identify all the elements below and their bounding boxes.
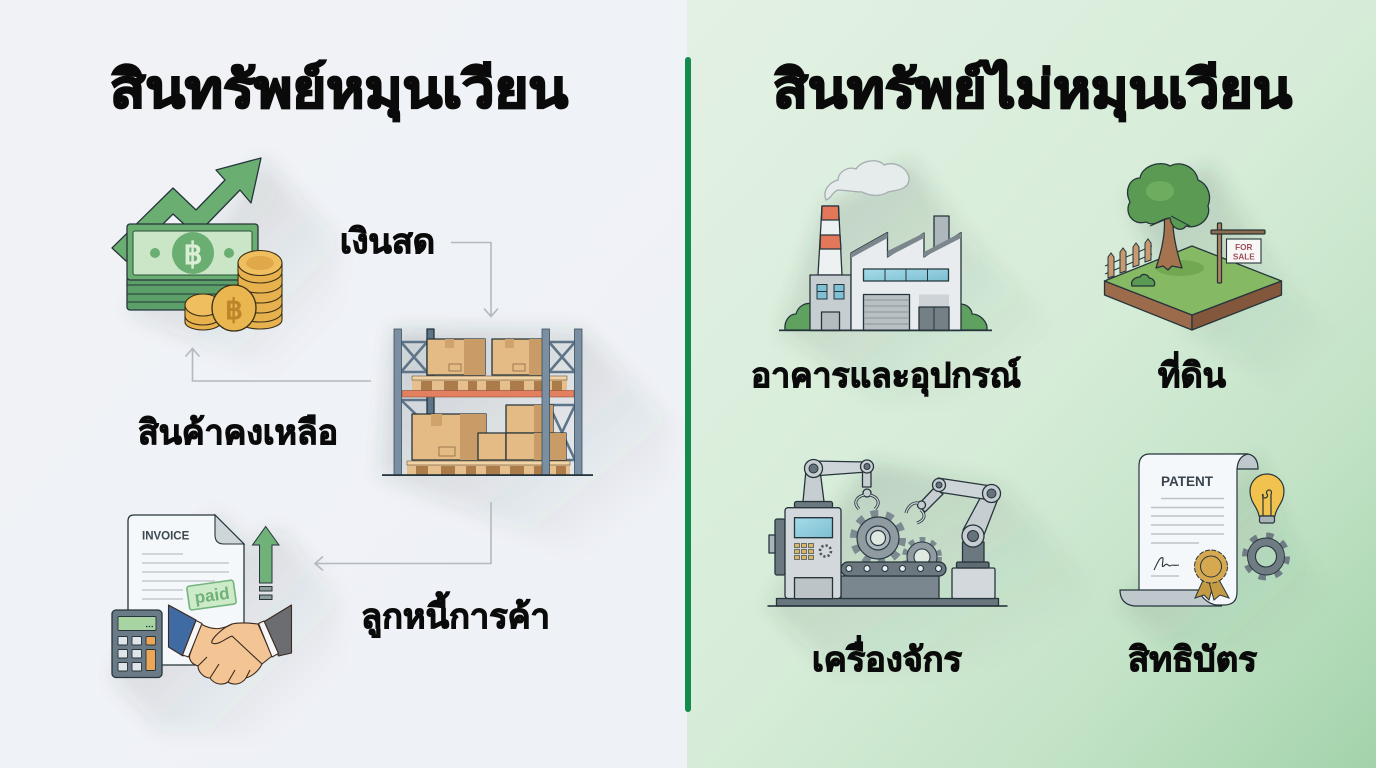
sale sign <box>1211 223 1265 283</box>
panel: non-current assets background <box>687 0 1376 768</box>
main hall <box>851 232 961 330</box>
invoice document: INVOICE <box>142 530 190 542</box>
icon: industrial machinery <box>768 460 1008 607</box>
label: land: ที่ดิน <box>1158 351 1226 395</box>
icon: warehouse rack with boxes <box>382 329 593 476</box>
panel: current assets background <box>0 0 687 768</box>
label: inventory: สินค้าคงเหลือ <box>138 414 338 452</box>
upper pallet <box>412 376 567 391</box>
icon: cash with rising arrow and coins: ฿ <box>183 238 203 271</box>
orange shelf beam <box>402 390 574 397</box>
seal and ribbon <box>1194 550 1229 600</box>
gear <box>1245 536 1287 578</box>
small gear <box>905 540 939 574</box>
front uprights <box>394 329 582 475</box>
base plate <box>776 598 998 606</box>
divider between panels <box>685 57 691 712</box>
sale sign: FOR <box>1235 243 1253 252</box>
label: patents: สิทธิบัตร <box>1128 641 1258 679</box>
side door <box>919 294 949 306</box>
rear posts and bracing <box>401 342 575 460</box>
handshake <box>168 605 292 684</box>
label: accounts receivable: ลูกหนี้การค้า <box>361 591 550 638</box>
chimney <box>818 206 842 275</box>
calculator <box>112 610 162 678</box>
green up arrow <box>252 526 279 600</box>
signature <box>1154 558 1179 570</box>
smoke cloud <box>825 161 909 200</box>
soil block <box>1104 281 1192 330</box>
vent <box>934 216 949 248</box>
title: current assets: สินทรัพย์หมุนเวียน <box>110 60 569 122</box>
lightbulb <box>1250 474 1284 523</box>
scroll paper <box>1237 454 1258 469</box>
boxes lower shelf <box>412 405 566 460</box>
label: buildings and equipment: อาคารและอุปกรณ์ <box>751 356 1021 397</box>
arrow: cash to inventory <box>451 242 498 316</box>
long drop shadows <box>112 158 1350 740</box>
left robot arm <box>803 460 878 509</box>
icon: coin stack <box>185 250 282 331</box>
bushes <box>785 303 812 330</box>
large gear <box>854 514 902 562</box>
label: machinery: เครื่องจักร <box>812 635 963 679</box>
title: non-current assets: สินทรัพย์ไม่หมุนเวียน <box>773 59 1292 122</box>
icon: invoice, calculator and handshake <box>112 515 292 684</box>
right robot arm <box>906 478 1000 598</box>
small building <box>810 275 851 330</box>
arrow: inventory to receivables <box>315 502 491 570</box>
tree <box>1128 164 1210 270</box>
icon: patent certificate with bulb and gear <box>1120 454 1287 606</box>
fence <box>1105 239 1152 278</box>
label: cash: เงินสด <box>340 223 435 261</box>
paid stamp: paid <box>193 584 231 607</box>
icon: land plot for sale <box>1104 164 1282 330</box>
bush on plot <box>1132 274 1155 286</box>
invoice document <box>128 515 244 665</box>
paid stamp <box>187 580 236 610</box>
sale sign: SALE <box>1233 252 1255 262</box>
conveyor <box>841 576 939 598</box>
roller door <box>864 294 910 330</box>
boxes upper shelf <box>427 339 542 375</box>
control cabinet <box>775 519 785 575</box>
arrow: inventory to cash <box>186 348 371 381</box>
icon: factory <box>779 161 992 331</box>
icon: cash with rising arrow and coins <box>112 158 282 331</box>
icon: coin stack: ฿ <box>225 294 243 325</box>
icon: patent certificate with bulb and gear: PATENT <box>1161 474 1214 489</box>
lower pallet <box>407 461 570 475</box>
hall windows <box>864 269 948 281</box>
